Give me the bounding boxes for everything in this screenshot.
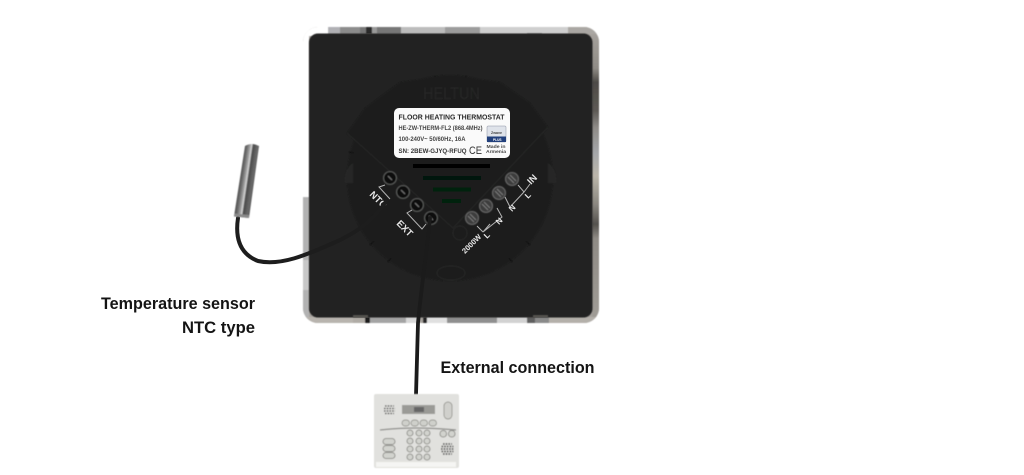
temperature sensor with cable [234,144,387,262]
product label: HE-ZW-THERM-FL2 (868.4MHz) [398,126,482,132]
terminal labels: L [523,191,533,200]
product label: 100-240V~ 50/60Hz, 16A [398,137,466,143]
callout: external connection: External connection [440,359,594,377]
callout: temperature sensor: NTC type [182,319,255,337]
product label [394,108,510,158]
callout: temperature sensor [101,295,256,337]
product label: Made in [486,144,506,149]
z-wave logo: PLUS [493,138,502,142]
terminal labels: 2000W [460,232,484,255]
left terminals [384,172,438,224]
display [402,405,435,414]
terminal labels [367,173,540,255]
speakers [384,406,454,454]
z-wave logo [487,126,506,142]
terminal labels: IN [525,173,540,187]
external connection cable [416,218,430,395]
sensor probe [234,144,259,218]
product label: Armenia [486,149,507,154]
top buttons [402,420,436,426]
bottom tabs [353,315,548,318]
terminal labels: N [507,203,518,213]
z-wave logo: Zwave [491,131,502,135]
product label: CE [469,145,482,157]
metal frame [300,24,599,323]
product label: FLOOR HEATING THERMOSTAT [398,112,505,122]
terminal labels: N [494,216,505,226]
terminal labels: NTC [367,189,389,211]
terminal labels: EXT [394,218,415,239]
round mounting recess [345,75,556,281]
right terminals [466,172,518,224]
black plate [309,34,592,318]
thermostat back plate [300,24,599,323]
callout: temperature sensor: Temperature sensor [101,295,256,313]
upper wedge [347,75,548,228]
external keypad device [374,394,459,468]
wiring schematic lines [379,184,530,232]
keypad buttons [383,430,455,460]
product label: SN: 2BEW-GJYQ-RFUQ [398,148,467,155]
ventilation slots [413,164,490,203]
nav button [444,402,452,419]
round mounting recess: HELTUN [423,84,480,103]
terminal labels: L [482,231,492,240]
